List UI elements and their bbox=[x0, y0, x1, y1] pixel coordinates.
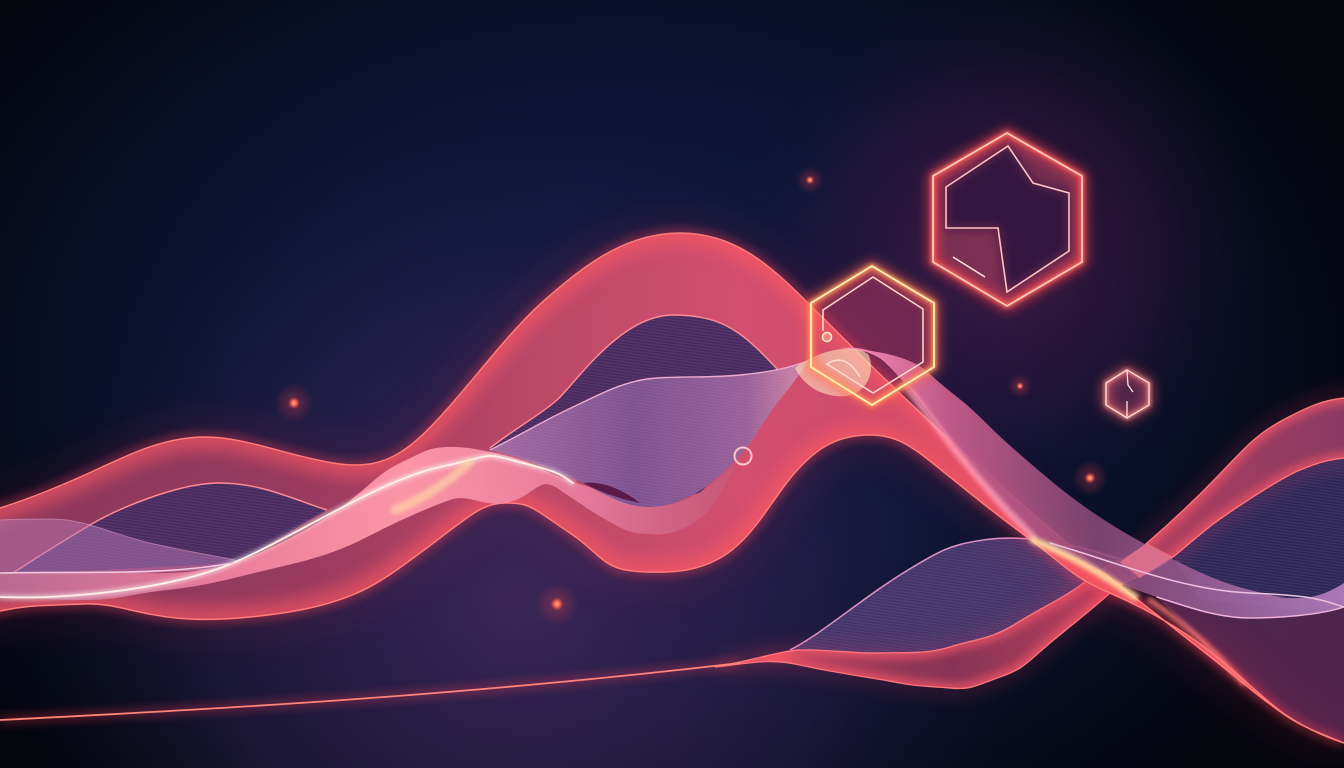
wave: lilac left band bbox=[0, 519, 240, 577]
wave highlights: white and gold streaks bbox=[0, 385, 1344, 683]
hexagon fill: medium, behind the ribbon bbox=[811, 266, 934, 405]
glowing particles bbox=[274, 166, 1108, 626]
wave: rising right ribbon with thin tail bbox=[0, 392, 1344, 720]
node: small circle on the wave bbox=[734, 448, 752, 464]
wave: lower right translucent sheet bbox=[1157, 597, 1344, 743]
wave: pink flowing band bbox=[0, 447, 735, 600]
wave: right side mesh panel bbox=[1173, 458, 1344, 610]
hexagon: medium bbox=[795, 266, 934, 405]
wave: main red ribbon bbox=[0, 233, 1344, 743]
wave gap: left dark mesh bbox=[10, 483, 327, 575]
wave: lilac right band bbox=[840, 348, 1344, 618]
wave: lilac centre lens bbox=[490, 360, 810, 507]
wave: lower right mesh dome bbox=[790, 538, 1157, 668]
hexagon: small bbox=[1106, 370, 1149, 418]
wave gap: centre dark mesh bbox=[490, 315, 780, 505]
hexagon: large bbox=[933, 133, 1082, 306]
wave crossing: coral overlap patch bbox=[1120, 543, 1173, 578]
